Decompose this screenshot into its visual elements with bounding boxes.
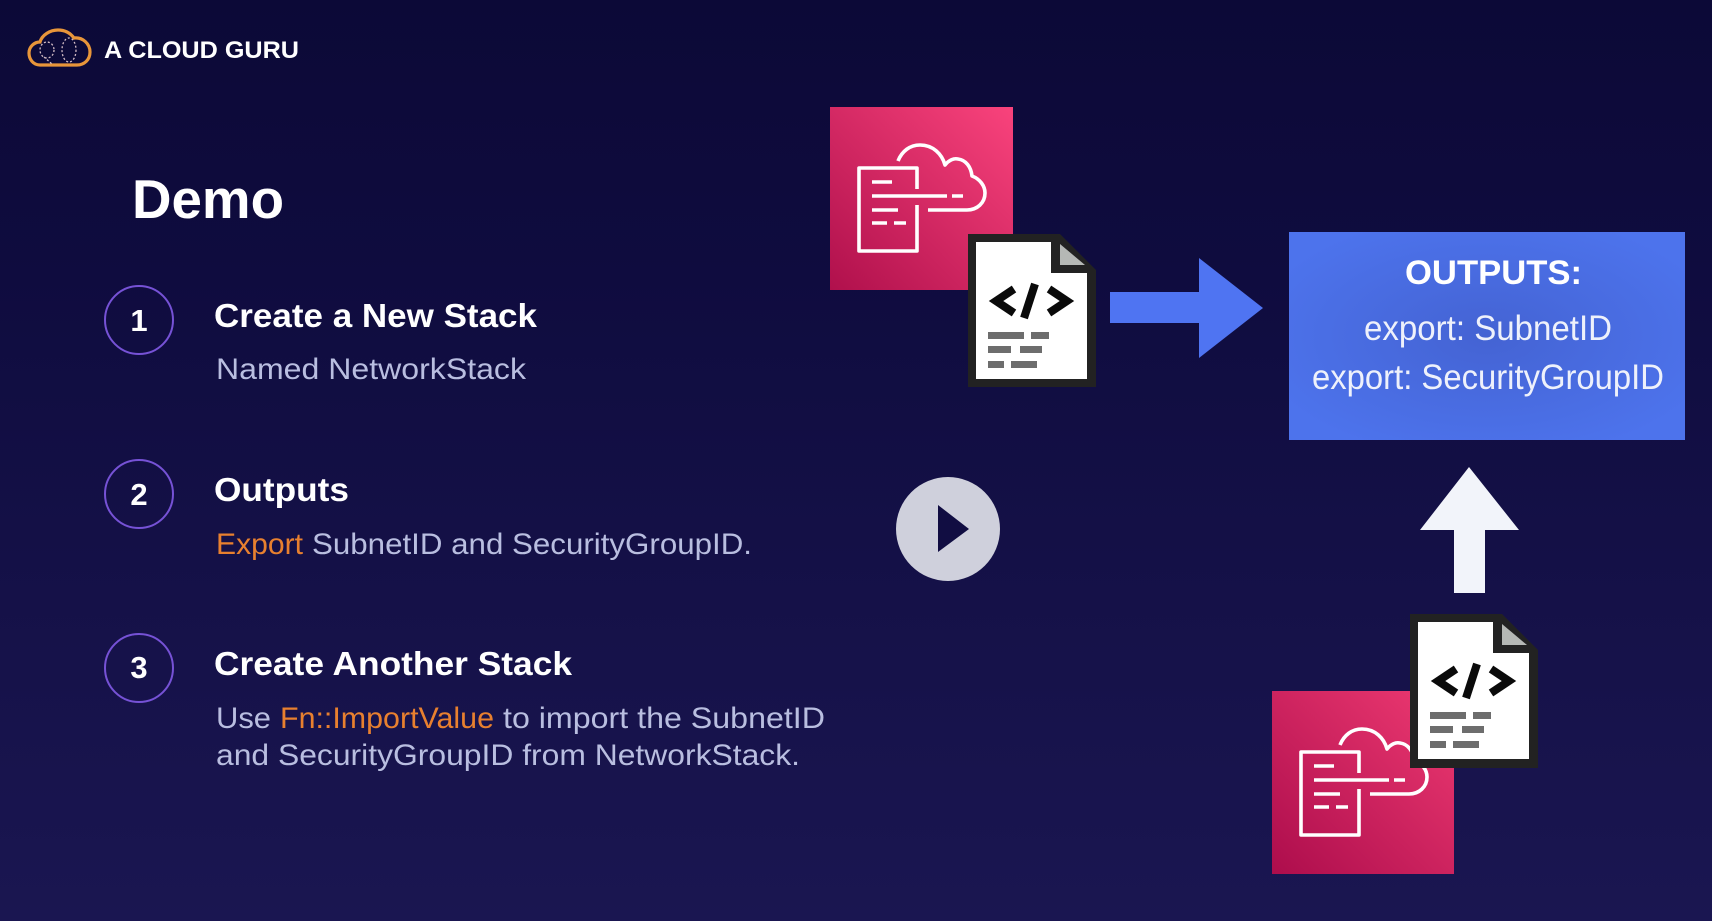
step number 2: 2 — [130, 477, 148, 512]
step 2 — [105, 460, 752, 561]
step 3 description: Fn::ImportValue — [280, 702, 494, 735]
outputs heading: OUTPUTS: — [1405, 254, 1582, 292]
step 3 description: Use — [216, 702, 271, 735]
step number 3 — [105, 634, 173, 702]
icon: CloudFormation stack top — [830, 107, 1013, 290]
step number 2 — [105, 460, 173, 528]
step 3 description: and SecurityGroupID from NetworkStack. — [216, 739, 800, 772]
icon: CloudFormation stack bottom — [1272, 691, 1454, 874]
step 2 description: Export — [216, 528, 304, 561]
step 1 description: Named NetworkStack — [216, 353, 527, 386]
step number 1 — [105, 286, 173, 354]
outputs line 2: export: SecurityGroupID — [1312, 358, 1664, 397]
step number 3: 3 — [130, 650, 148, 685]
icon: play button — [896, 477, 1000, 581]
arrow: blue pointing right — [1110, 258, 1263, 358]
step 3 description: to import the SubnetID — [503, 702, 825, 735]
step 3 heading: Create Another Stack — [214, 645, 573, 682]
outputs line 1: export: SubnetID — [1364, 309, 1612, 348]
step 1 — [105, 286, 538, 386]
step number 1: 1 — [130, 303, 148, 338]
step 3 description — [216, 702, 825, 772]
logo wordmark: A CLOUD GURU — [104, 37, 299, 64]
icon: cloud logo — [29, 30, 90, 65]
step 1 heading: Create a New Stack — [214, 297, 538, 334]
panel: outputs — [1289, 232, 1685, 440]
step 2 heading: Outputs — [214, 471, 349, 508]
icon: code document bottom — [1410, 614, 1538, 768]
logo: A Cloud Guru — [29, 30, 299, 65]
arrow: white pointing up — [1420, 467, 1519, 593]
step 2 description: SubnetID and SecurityGroupID. — [312, 528, 752, 561]
icon: code document top — [968, 234, 1096, 387]
step 3 — [105, 634, 825, 772]
title: Demo — [132, 168, 284, 230]
